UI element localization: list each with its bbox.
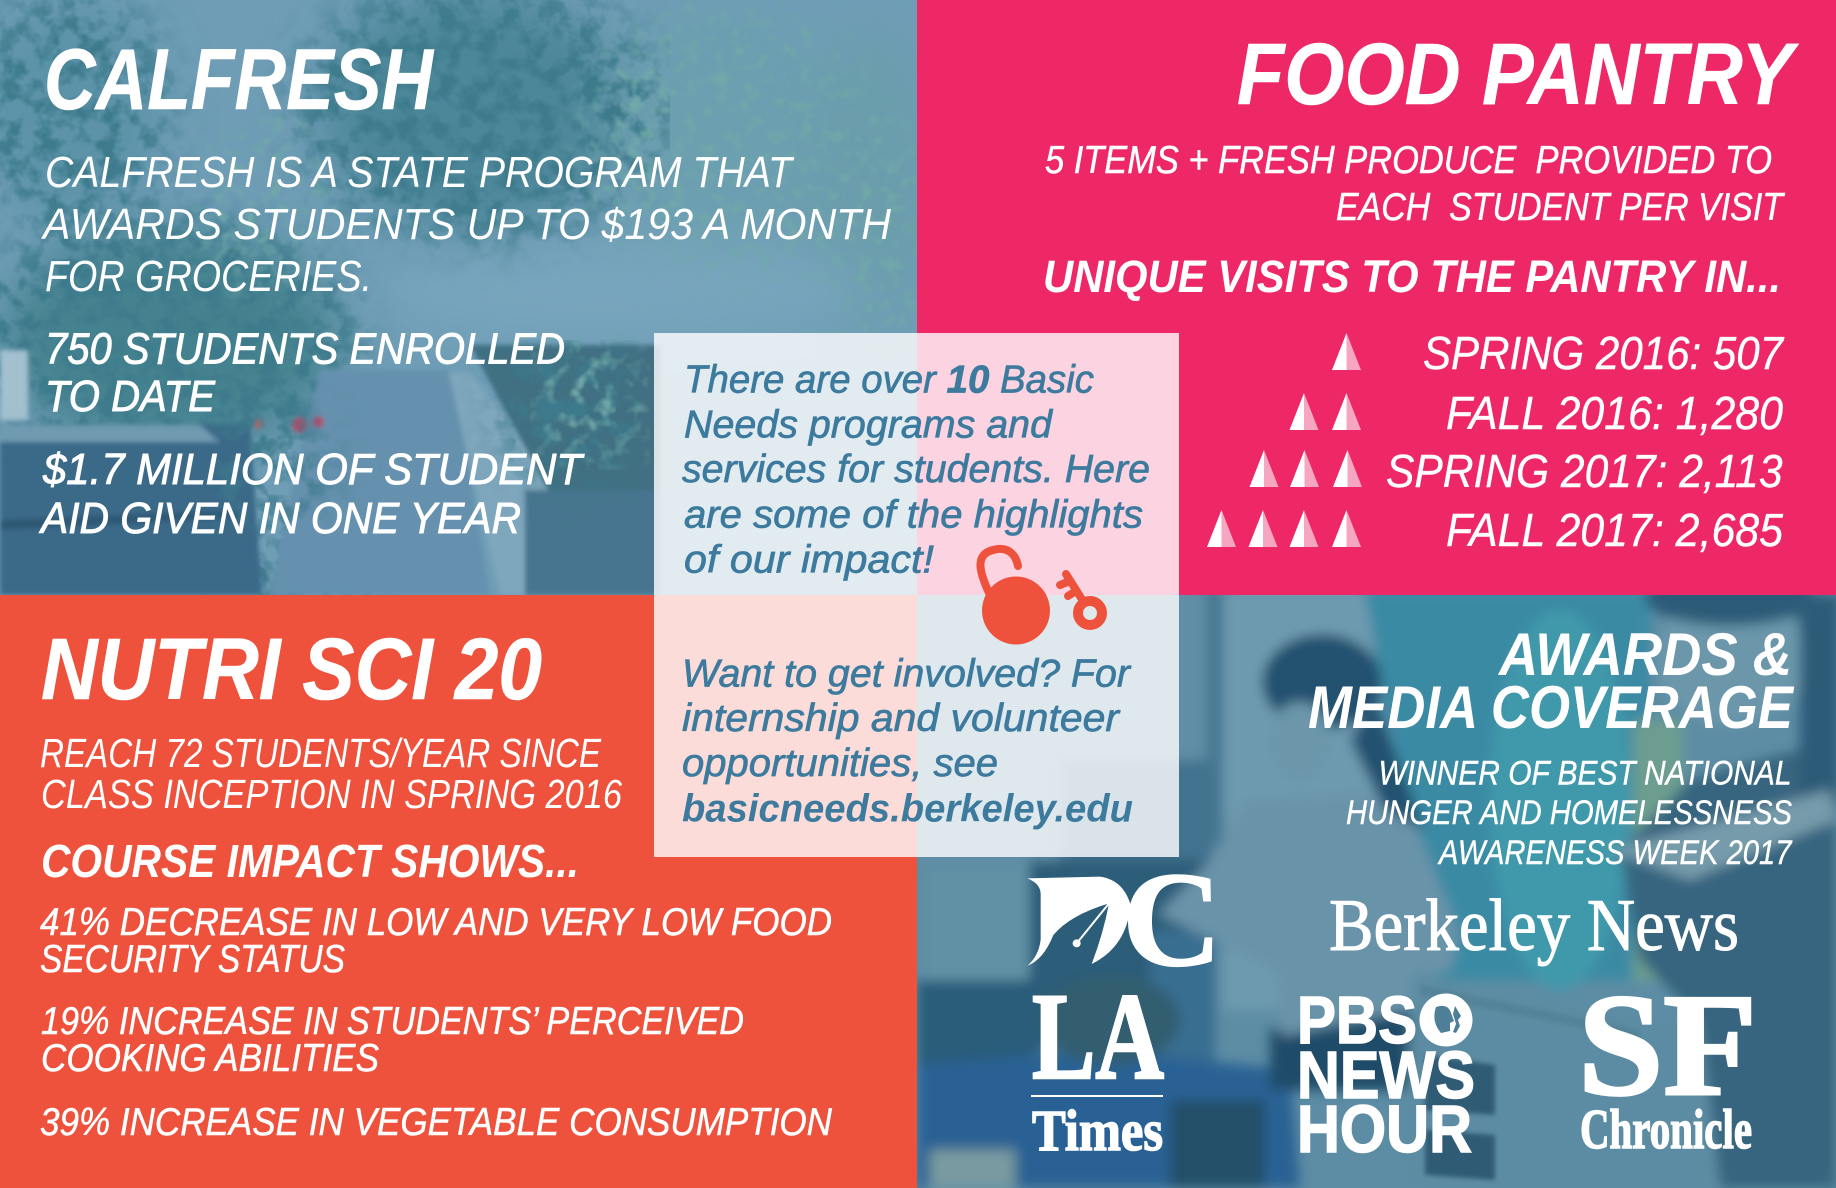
icon: open lock and key xyxy=(980,549,1102,644)
get involved text: basicneeds.berkeley.edu xyxy=(682,788,1133,830)
heading: CalFresh: CALFRESH xyxy=(44,32,435,128)
pictogram chart: visits by semester xyxy=(1207,327,1784,556)
stat: food security: SECURITY STATUS xyxy=(40,938,345,981)
description text: FOR GROCERIES. xyxy=(45,252,372,301)
subheading: unique visits: UNIQUE VISITS TO THE PANTRY IN... xyxy=(1043,251,1781,302)
stat: food security: 41% DECREASE IN LOW AND VERY LOW FOOD xyxy=(40,901,832,944)
row: spring 2017: SPRING 2017: 2,113 xyxy=(1386,445,1783,497)
pantry description xyxy=(1045,139,1786,229)
logo: SF Chronicle: SF xyxy=(1578,964,1757,1126)
stat: students enrolled: TO DATE xyxy=(45,372,216,421)
logo: PBS NewsHour: NEWS xyxy=(1297,1038,1475,1113)
description text: CALFRESH IS A STATE PROGRAM THAT xyxy=(45,148,795,197)
intro text: Needs programs and xyxy=(684,404,1053,446)
intro text xyxy=(682,358,1150,582)
intro text: services for students. Here xyxy=(682,448,1150,491)
heading: Awards and Media Coverage xyxy=(1308,621,1795,741)
course reach text: CLASS INCEPTION IN SPRING 2016 xyxy=(41,771,622,817)
course reach text: REACH 72 STUDENTS/YEAR SINCE xyxy=(40,730,602,776)
stat: cooking abilities xyxy=(41,1000,744,1080)
award description: WINNER OF BEST NATIONAL xyxy=(1378,754,1792,792)
logo: LA Times xyxy=(1031,968,1164,1163)
row: fall 2017 xyxy=(1207,504,1783,556)
subheading: course impact: COURSE IMPACT SHOWS... xyxy=(41,835,579,887)
intro text: of our impact! xyxy=(684,538,934,582)
logo: PBS NewsHour: PBS xyxy=(1297,983,1417,1058)
panel: awards and media coverage xyxy=(917,570,1836,1188)
logo: Daily Cal: C xyxy=(1122,845,1222,995)
panel: food pantry xyxy=(917,0,1836,595)
logo: Daily Cal xyxy=(1027,845,1222,995)
row: fall 2016: FALL 2016: 1,280 xyxy=(1446,387,1783,439)
course reach text xyxy=(40,730,622,817)
stat: cooking abilities: 19% INCREASE IN STUDENTS’ PERCEIVED xyxy=(41,1000,744,1043)
row: fall 2017: FALL 2017: 2,685 xyxy=(1446,504,1783,556)
intro text: There are over 10 Basic xyxy=(684,358,1094,402)
get involved text: Want to get involved? For xyxy=(682,652,1132,696)
award description xyxy=(1346,754,1792,872)
description text xyxy=(40,148,891,301)
stat: students enrolled: 750 STUDENTS ENROLLED xyxy=(45,324,565,374)
logo: PBS NewsHour xyxy=(1297,983,1475,1167)
logo: SF Chronicle: Chronicle xyxy=(1580,1099,1752,1161)
logo: LA Times: LA xyxy=(1032,968,1164,1105)
logo: PBS NewsHour: HOUR xyxy=(1297,1092,1472,1167)
stat: student aid: $1.7 MILLION OF STUDENT xyxy=(42,445,585,494)
photo background: garden xyxy=(0,0,930,620)
stat: student aid xyxy=(38,445,585,543)
row: spring 2016: SPRING 2016: 507 xyxy=(1423,327,1784,379)
photo background: nutrition booth xyxy=(917,570,1836,1188)
pantry description: EACH STUDENT PER VISIT xyxy=(1336,186,1786,229)
panel: nutri sci 20 xyxy=(0,595,917,1188)
row: fall 2016 xyxy=(1290,387,1783,439)
logo: LA Times: Times xyxy=(1032,1098,1163,1163)
stat: student aid: AID GIVEN IN ONE YEAR xyxy=(38,494,521,543)
intro text: are some of the highlights xyxy=(684,494,1143,536)
stat: vegetable consumption: 39% INCREASE IN VEGETABLE CONSUMPTION xyxy=(40,1101,833,1144)
description text: AWARDS STUDENTS UP TO $193 A MONTH xyxy=(40,200,891,249)
panel: calfresh xyxy=(0,0,930,620)
stat: cooking abilities: COOKING ABILITIES xyxy=(41,1037,379,1080)
get involved text: internship and volunteer xyxy=(682,697,1121,740)
logo: Berkeley News: Berkeley News xyxy=(1329,885,1739,967)
get involved text: opportunities, see xyxy=(682,742,998,785)
heading: Nutri Sci 20: NUTRI SCI 20 xyxy=(41,621,542,718)
stat: students enrolled xyxy=(45,324,565,421)
center callout box xyxy=(654,333,1179,857)
get involved text xyxy=(682,652,1133,830)
heading: Awards and Media Coverage: AWARDS & xyxy=(1497,621,1792,688)
stat: food security xyxy=(40,901,832,981)
